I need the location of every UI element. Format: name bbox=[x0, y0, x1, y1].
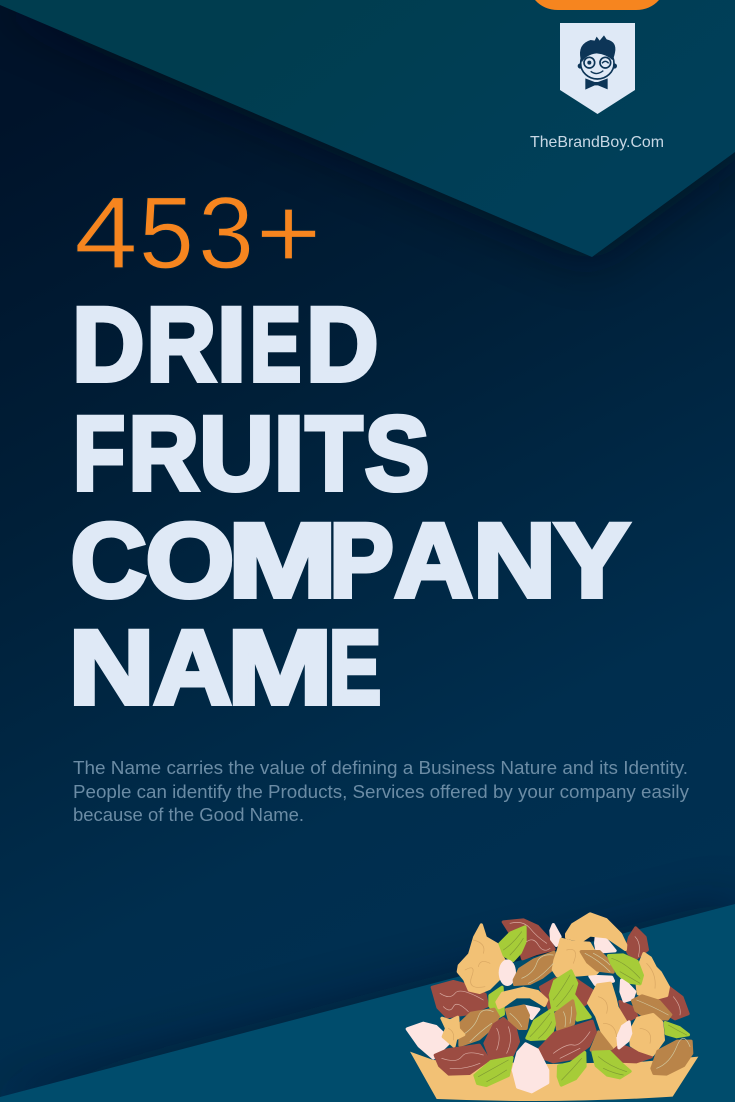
description paragraph: The Name carries the value of defining a Business Nature and its Identity. bbox=[73, 758, 688, 778]
badge shield bbox=[560, 23, 635, 114]
red date centre large bbox=[539, 1021, 595, 1062]
white almond right bbox=[621, 980, 635, 1001]
title line: FRUITS: T bbox=[306, 396, 362, 512]
title line: DRIED: D bbox=[306, 286, 378, 404]
walnut right bbox=[637, 954, 668, 999]
green leaf top left bbox=[500, 927, 525, 960]
title line: DRIED: R bbox=[146, 286, 216, 404]
title line: COMPANY: C bbox=[71, 502, 146, 620]
brown almond middle bbox=[507, 1006, 528, 1028]
green leaf right bbox=[609, 955, 642, 984]
walnut left bbox=[458, 925, 506, 992]
description paragraph bbox=[73, 758, 689, 825]
walnut centre bbox=[553, 939, 602, 976]
title line: NAME: A bbox=[154, 610, 232, 726]
cashew top bbox=[567, 914, 626, 949]
walnut small bbox=[442, 1017, 464, 1046]
title line: COMPANY: Y bbox=[554, 502, 630, 620]
green leaf small right bbox=[665, 1023, 688, 1037]
shadow under top panel bbox=[0, 0, 735, 265]
title line: FRUITS: S bbox=[365, 396, 429, 512]
brown almond 1 bbox=[514, 952, 554, 984]
number 453+: + bbox=[256, 176, 321, 290]
illustration: tray of dried fruits and nuts bbox=[407, 914, 698, 1101]
title line: FRUITS: F bbox=[73, 396, 125, 512]
title line: NAME: E bbox=[329, 610, 381, 726]
description paragraph: because of the Good Name. bbox=[73, 805, 304, 825]
brown almond 2 bbox=[581, 952, 613, 972]
number 453+: 4 bbox=[74, 176, 138, 290]
title line: FRUITS: R bbox=[128, 396, 199, 512]
red date lower right bbox=[611, 1045, 651, 1062]
title line: COMPANY: P bbox=[329, 502, 394, 620]
brand name: TheBrandBoy.Com bbox=[530, 134, 664, 151]
red date lower left bbox=[485, 1019, 518, 1058]
panel: top teal banner bbox=[0, 0, 735, 257]
description paragraph: People can identify the Products, Services offered by your company easily bbox=[73, 782, 689, 802]
icon: boy face with glasses and bow tie bbox=[578, 35, 617, 90]
title line: FRUITS: U bbox=[199, 396, 274, 512]
walnut lower right tall bbox=[589, 983, 630, 1049]
brown almond right bbox=[633, 996, 671, 1019]
title line: COMPANY: A bbox=[394, 502, 472, 620]
title line: COMPANY: M bbox=[228, 502, 337, 620]
white almond front bbox=[513, 1044, 548, 1092]
brown almond far right bbox=[652, 1041, 692, 1074]
title line: DRIED: E bbox=[250, 286, 301, 404]
title line: COMPANY: N bbox=[473, 502, 556, 620]
red date bottom left bbox=[435, 1045, 489, 1074]
title line: COMPANY: O bbox=[146, 502, 234, 620]
green leaf bottom right bbox=[593, 1052, 630, 1078]
shadow above bottom panel bbox=[0, 898, 735, 1102]
almond left bbox=[407, 1023, 448, 1058]
green leaf centre top bbox=[550, 971, 577, 1010]
panel: bottom teal wedge bbox=[0, 904, 735, 1102]
green leaf bottom left bbox=[475, 1058, 512, 1085]
title line: NAME: M bbox=[227, 610, 332, 726]
cashew middle bbox=[497, 988, 547, 1008]
title line: NAME: N bbox=[69, 610, 154, 726]
tray bbox=[410, 1052, 698, 1101]
brown almond lower centre bbox=[591, 1032, 612, 1050]
brown almond left bbox=[460, 1009, 498, 1045]
title line: DRIED: I bbox=[217, 286, 246, 404]
back layer of fruit bbox=[432, 920, 688, 1020]
brown almond centre bbox=[555, 1001, 575, 1030]
walnut lower right bbox=[630, 1015, 663, 1055]
texture lines bbox=[440, 922, 690, 1082]
green leaf centre low bbox=[527, 1010, 554, 1039]
green leaf bottom centre bbox=[558, 1053, 585, 1085]
white almond lower right bbox=[618, 1022, 631, 1048]
orange tab bbox=[535, 0, 659, 10]
logo badge bbox=[530, 23, 664, 151]
number 453+: 5 bbox=[139, 176, 194, 290]
title line: DRIED: D bbox=[72, 286, 144, 404]
number 453+: 3 bbox=[198, 176, 254, 290]
title bbox=[69, 286, 630, 726]
white almond small bbox=[499, 959, 516, 986]
title line: FRUITS: I bbox=[274, 396, 304, 512]
